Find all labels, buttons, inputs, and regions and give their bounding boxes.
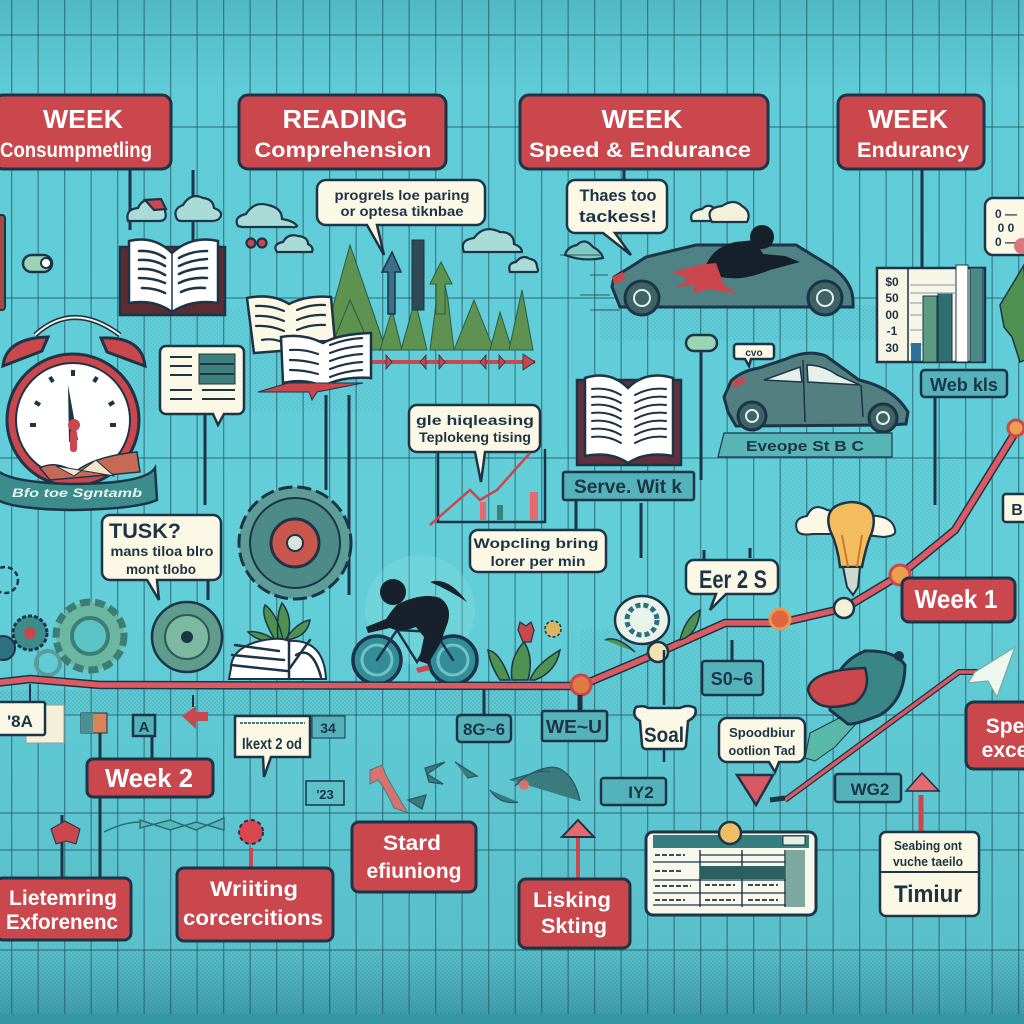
label: soal xyxy=(634,650,696,762)
speech bubble: reading target xyxy=(409,405,540,482)
header: week consolidating: WEEK xyxy=(43,104,123,134)
small timeline with arrows xyxy=(372,354,535,370)
icon: cyclist xyxy=(353,555,477,684)
small label 23: '23 xyxy=(316,787,334,802)
label: web kits: Web kls xyxy=(930,375,998,395)
speech bubble: progress reading xyxy=(317,180,485,255)
label: week one: Week 1 xyxy=(914,584,998,614)
arrow up: lisking xyxy=(562,820,594,880)
speech bubble: reading target: gle hiqleasing xyxy=(416,412,534,428)
small label 34 xyxy=(312,716,345,738)
speech bubble: progress reading: progrels loe paring xyxy=(334,187,470,203)
icon: alarm clock xyxy=(3,318,145,486)
box: timer xyxy=(880,832,979,916)
header: speed and endurance: WEEK xyxy=(602,104,683,134)
speech bubble: year two: Eer 2 S xyxy=(699,566,767,594)
speech bubble: words per minute: Wopcling bring xyxy=(474,535,598,551)
label: speed right edge xyxy=(966,702,1024,769)
icon: flower plant xyxy=(488,621,561,680)
label: week one xyxy=(902,578,1015,622)
small label A xyxy=(133,715,155,736)
label: week two xyxy=(87,759,213,797)
speech bubble: task: mont tlobo xyxy=(126,561,196,577)
bar chart: $0 xyxy=(885,275,899,289)
bar chart xyxy=(877,265,985,362)
icon: stacked open books xyxy=(247,296,371,400)
small label 23 xyxy=(306,781,344,805)
icon: round dial xyxy=(152,602,222,672)
speech bubble: speed practice: ootlion Tad xyxy=(728,743,796,758)
header: speed and endurance xyxy=(520,95,768,169)
icon: helmet xyxy=(805,651,905,761)
mountains and trees row xyxy=(321,240,533,350)
label: stub left: '8A xyxy=(7,712,33,731)
card with small chart xyxy=(160,346,244,425)
speech bubble: task: mans tiloa blro xyxy=(110,543,214,559)
box: timer: Timiur xyxy=(894,881,962,908)
pill connector left xyxy=(23,255,52,272)
speech bubble edge right: 0 — xyxy=(995,235,1017,249)
header: reading comprehension: READING xyxy=(282,104,408,134)
edge bar left xyxy=(0,215,5,310)
bar chart: 00 xyxy=(885,308,899,322)
icon: small left gears xyxy=(0,567,60,675)
speech bubble: task xyxy=(102,515,221,600)
icon: leaf right edge xyxy=(1000,238,1024,362)
tiny speech bubble: cvo xyxy=(745,348,763,359)
label: WG2 xyxy=(835,774,901,802)
speech bubble edge right xyxy=(985,198,1024,255)
icon: parked car xyxy=(724,353,908,432)
zigzag strip xyxy=(104,818,224,832)
label: IY2 xyxy=(601,778,666,805)
icon: red burst arrow two xyxy=(239,820,263,874)
label: IY2: IY2 xyxy=(628,783,654,802)
banner under clock xyxy=(0,468,157,510)
label: stub right edge: B xyxy=(1011,502,1023,519)
icon: decorative wheel xyxy=(605,596,700,652)
speech bubble: text 2: Ikext 2 od xyxy=(242,736,302,753)
header: speed and endurance: Speed & Endurance xyxy=(529,139,751,162)
clouds near car xyxy=(565,202,749,259)
speech bubble edge right: 0 0 xyxy=(998,221,1015,235)
speech bubble: thanks: tackess! xyxy=(579,207,657,226)
label: 8G-6: 8G~6 xyxy=(463,720,505,739)
box: writing corrections: Wriiting xyxy=(210,878,298,901)
label: WG2: WG2 xyxy=(851,780,889,799)
banner under clock: Bfo toe Sgntamb xyxy=(12,486,142,500)
icon: green gear xyxy=(56,602,124,670)
main timeline xyxy=(0,420,1024,695)
header: endurance xyxy=(838,95,984,169)
box: timer: vuche taeilo xyxy=(893,854,963,869)
clouds upper left xyxy=(127,196,312,252)
speech bubble edge right: 0 — xyxy=(995,207,1017,221)
pill connector centre xyxy=(686,335,717,351)
small label 34: 34 xyxy=(320,720,336,736)
red arrow left xyxy=(182,695,208,729)
speech bubble: thanks: Thaes too xyxy=(580,186,656,205)
icon: large gear xyxy=(239,487,351,599)
icon: open book three xyxy=(577,376,681,465)
icon: open book one xyxy=(120,240,225,315)
clouds centre xyxy=(463,229,538,272)
icon: red star arrow one xyxy=(51,821,80,844)
speech bubble: task: TUSK? xyxy=(109,520,181,543)
line chart xyxy=(430,450,545,525)
label: web kits xyxy=(921,370,1007,397)
speech bubble: words per minute xyxy=(470,530,606,572)
box: lisking speaking: Skting xyxy=(541,915,607,938)
box: listening experience: Lietemring xyxy=(9,887,117,910)
label: car caption: Eveope St B C xyxy=(746,438,864,455)
icon: paper stack with plant xyxy=(229,603,326,679)
label: car caption xyxy=(718,433,892,457)
label: week u: WE~U xyxy=(546,717,602,737)
label: speed right edge: Spe xyxy=(986,715,1024,738)
header: endurance: Endurancy xyxy=(857,139,969,162)
label: S0-6: S0~6 xyxy=(711,669,753,689)
box: lisking speaking: Lisking xyxy=(533,889,611,912)
squiggly arrow xyxy=(370,762,580,813)
box: writing corrections: corcercitions xyxy=(183,907,323,930)
label: soal: Soal xyxy=(644,724,684,747)
table panel xyxy=(646,822,816,915)
label: 8G-6 xyxy=(457,690,511,742)
tiny speech bubble xyxy=(734,344,774,366)
speech bubble: text 2 xyxy=(235,716,310,777)
box: listening experience: Exforenenc xyxy=(6,911,118,934)
header: endurance: WEEK xyxy=(868,104,948,134)
icon: racing car with rider xyxy=(560,225,853,315)
label: serve with xyxy=(563,472,694,500)
bar chart: 30 xyxy=(885,341,899,355)
label: stub right edge xyxy=(1003,494,1024,522)
header: reading comprehension xyxy=(239,95,446,169)
small icon tag xyxy=(81,713,107,733)
label: stub left xyxy=(0,684,64,743)
box: writing corrections xyxy=(177,868,333,941)
speech bubble: year two xyxy=(686,560,778,610)
box: timer: Seabing ont xyxy=(894,838,963,853)
bar chart: -1 xyxy=(887,324,898,338)
speech bubble: speed practice: Spoodbiur xyxy=(729,725,795,740)
box: listening experience xyxy=(0,878,131,940)
box: start tuning: efiuniong xyxy=(366,860,462,883)
speech bubble: progress reading: or optesa tiknbae xyxy=(340,203,464,219)
box: start tuning xyxy=(352,822,476,892)
speech bubble: speed practice xyxy=(719,718,805,772)
label: week two: Week 2 xyxy=(105,763,193,793)
header: week consolidating: Consumpmetling xyxy=(0,139,152,162)
box: start tuning: Stard xyxy=(383,832,441,855)
label: serve with: Serve. Wit k xyxy=(574,477,682,498)
box: lisking speaking xyxy=(519,879,630,948)
label: S0-6 xyxy=(702,640,763,695)
header: week consolidating xyxy=(0,95,171,169)
small label A: A xyxy=(139,719,150,736)
header: reading comprehension: Comprehension xyxy=(254,139,432,162)
icon: lightbulb with clouds xyxy=(796,502,895,595)
label: week u xyxy=(542,695,607,741)
bar chart: 50 xyxy=(885,291,899,305)
speech bubble: reading target: Teplokeng tising xyxy=(419,429,531,445)
arrow with paper plane xyxy=(737,647,1015,805)
speech bubble: thanks xyxy=(567,180,667,255)
arrow up: timer xyxy=(906,773,939,832)
speech bubble: words per minute: lorer per min xyxy=(490,553,586,569)
